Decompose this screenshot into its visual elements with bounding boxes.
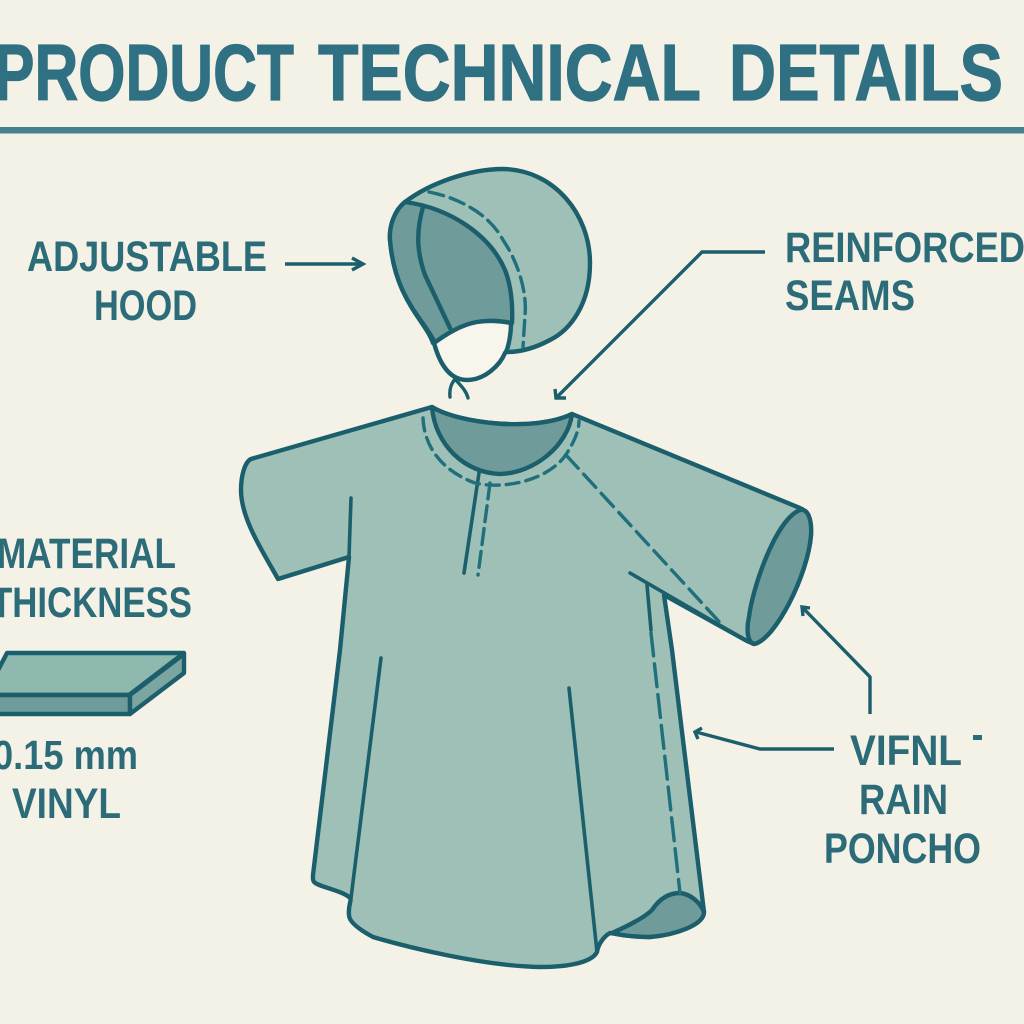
icon: poncho: [241, 407, 811, 967]
callout: material thickness: MATERIAL: [0, 530, 176, 578]
callout: reinforced seams: [555, 224, 1024, 398]
callout: adjustable hood: [27, 233, 363, 330]
icon: hood: [390, 169, 590, 398]
title: [0, 28, 1003, 117]
callout: adjustable hood: ADJUSTABLE: [27, 233, 267, 281]
callout: vinyl rain poncho: RAIN: [859, 776, 948, 824]
callout: vinyl rain poncho: VIFNL: [850, 727, 962, 775]
title: PRODUCT: [0, 28, 294, 117]
title: TECHNICAL: [318, 28, 701, 117]
callout: vinyl rain poncho: [695, 607, 982, 873]
title rule: [0, 127, 1024, 134]
callout: material thickness: VINYL: [12, 780, 121, 828]
callout: reinforced seams: SEAMS: [785, 272, 915, 320]
callout: vinyl rain poncho: PONCHO: [824, 825, 981, 873]
callout: adjustable hood: HOOD: [94, 282, 197, 330]
callout: material thickness: [0, 530, 192, 828]
icon: vinyl sheet: [0, 653, 184, 714]
